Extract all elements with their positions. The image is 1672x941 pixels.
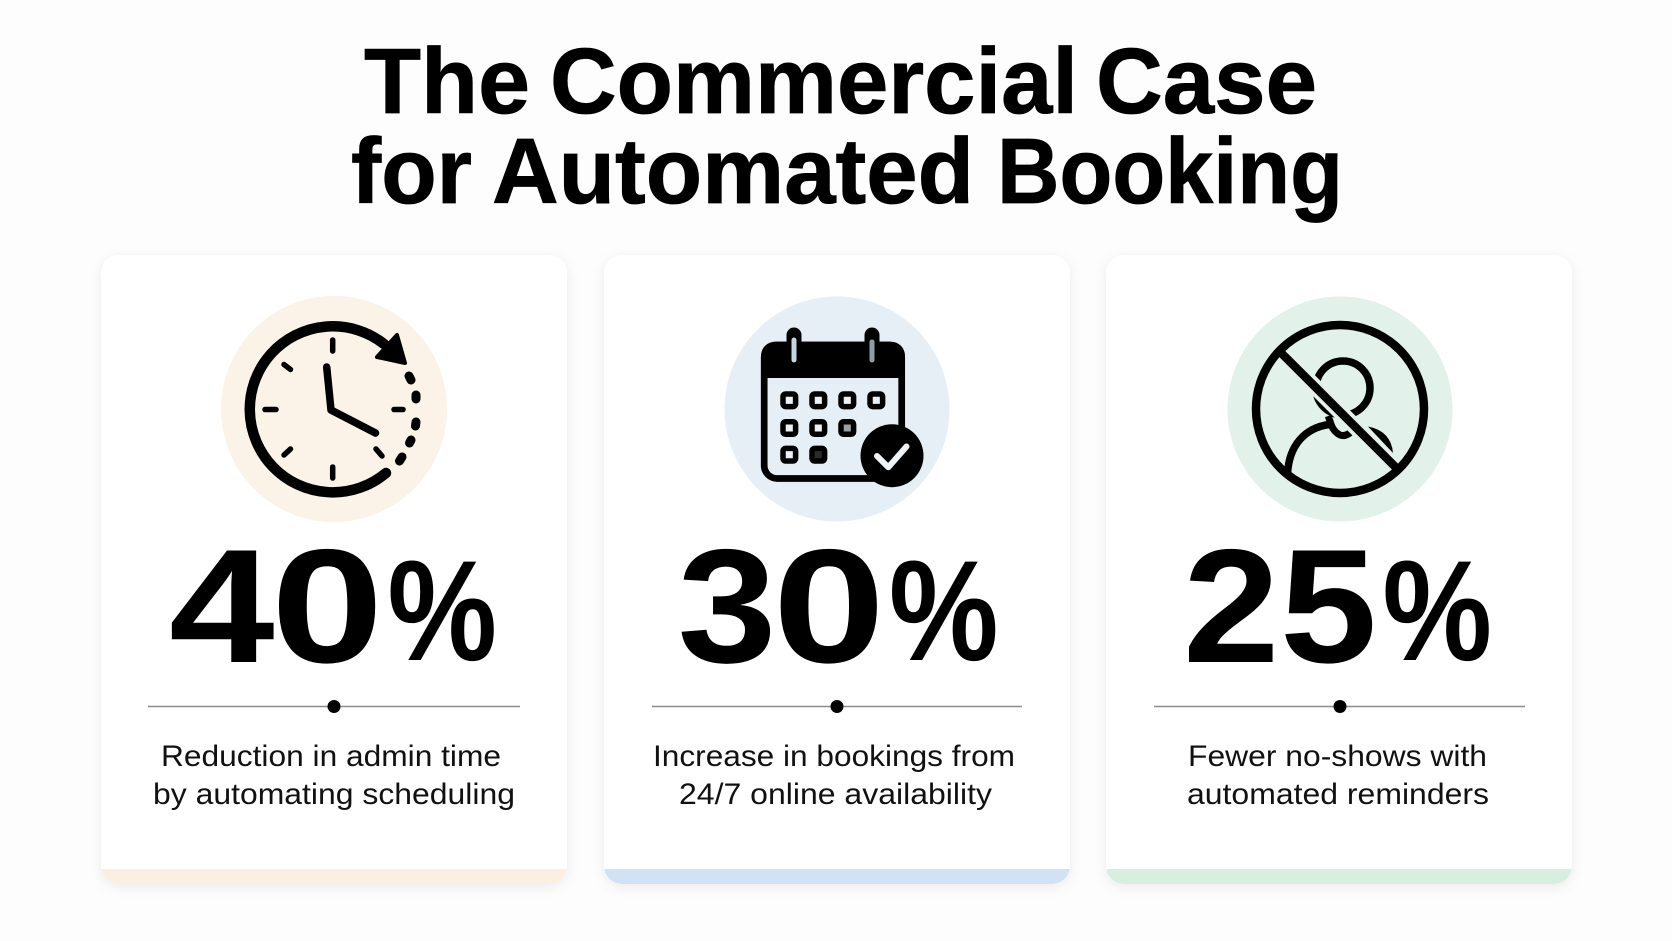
panel: admin time — [101, 255, 567, 884]
divider — [652, 700, 1022, 713]
description: Fewer no-shows with — [1188, 740, 1487, 773]
description: automated reminders — [1187, 778, 1489, 811]
divider — [148, 700, 520, 713]
description: Reduction in admin time — [161, 740, 501, 773]
title: Booking — [997, 119, 1343, 223]
description — [153, 740, 515, 811]
description — [653, 740, 1015, 811]
panel: no-shows — [1106, 255, 1572, 884]
stat: 30%: 0 — [773, 516, 885, 697]
stat: 30%: % — [889, 532, 998, 691]
icon: no person — [1228, 296, 1452, 522]
accent band: orange — [101, 869, 567, 884]
icon: calendar with check — [724, 296, 950, 522]
stat: 25%: 2 — [1183, 516, 1280, 697]
divider — [1154, 700, 1525, 713]
accent band: blue — [604, 869, 1070, 884]
panel: online bookings — [604, 255, 1070, 884]
description: 24/7 online availability — [679, 778, 992, 811]
stat: 25%: 5 — [1280, 516, 1377, 697]
title: Automated — [492, 119, 974, 223]
stat: 40%: % — [388, 532, 497, 691]
description: Increase in bookings from — [653, 740, 1015, 773]
stat: 30%: 3 — [678, 516, 776, 697]
title: Case — [1096, 29, 1317, 133]
description — [1187, 740, 1489, 811]
title — [351, 29, 1343, 223]
stat: 25%: % — [1382, 532, 1492, 691]
accent band: green — [1106, 869, 1572, 884]
title: The — [364, 29, 530, 133]
icon: clock with arrow — [221, 296, 447, 522]
title: Commercial — [550, 29, 1078, 133]
stat: 40%: 0 — [271, 516, 384, 697]
title: for — [351, 119, 472, 223]
stat: 40%: 4 — [169, 516, 275, 697]
description: by automating scheduling — [153, 778, 515, 811]
